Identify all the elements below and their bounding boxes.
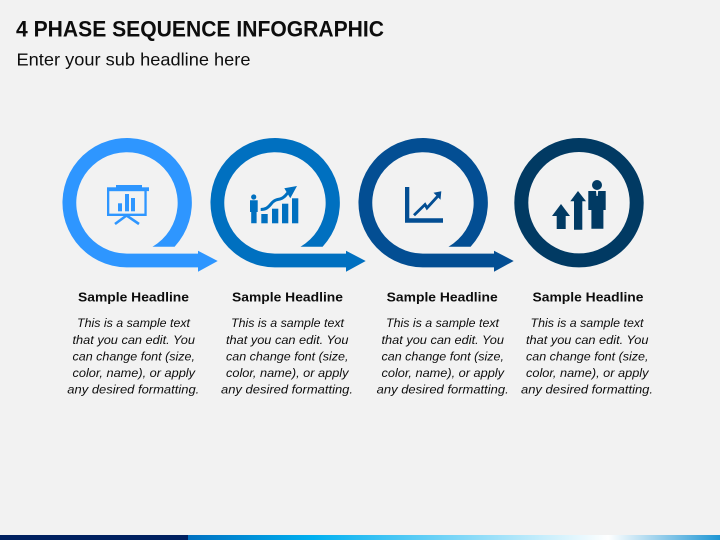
column 2 text [221, 290, 353, 396]
column 3 text: that you can edit. You [382, 333, 504, 347]
column 2 text: color, name), or apply [226, 366, 349, 380]
column 2 text: that you can edit. You [226, 333, 349, 347]
column 3 text: color, name), or apply [382, 366, 505, 380]
column 4 text: Sample Headline [532, 290, 644, 305]
column 4 text: that you can edit. You [526, 333, 649, 347]
column 4 text [521, 290, 653, 396]
subtitle: Enter your sub headline here [16, 50, 250, 70]
icon: line chart with arrow [405, 187, 443, 223]
phase 1 ring arrow [62, 138, 218, 272]
column 1 text [67, 290, 199, 396]
phase 2 ring arrow [210, 138, 366, 272]
column 1 text: color, name), or apply [72, 366, 196, 380]
column 3 text: Sample Headline [387, 290, 498, 305]
column 3 text: can change font (size, [382, 350, 504, 364]
icon: arrows and businessman [552, 180, 606, 230]
column 2 text: any desired formatting. [221, 382, 353, 396]
column 1 text: any desired formatting. [67, 382, 199, 396]
column 3 text [377, 290, 509, 396]
column 4 text: any desired formatting. [521, 382, 653, 396]
column 2 text: This is a sample text [231, 316, 345, 330]
title: 4 PHASE SEQUENCE INFOGRAPHIC [16, 17, 384, 42]
column 3 text: This is a sample text [386, 316, 500, 330]
column 4 text: can change font (size, [526, 350, 648, 364]
column 4 text: This is a sample text [530, 316, 644, 330]
column 1 text: Sample Headline [78, 290, 189, 305]
footer bar [0, 535, 720, 540]
icon: presentation board [107, 185, 149, 224]
phase 4 ring [521, 145, 637, 260]
phase 3 ring arrow [358, 138, 514, 272]
column 2 text: Sample Headline [232, 290, 343, 305]
column 3 text: any desired formatting. [377, 382, 509, 396]
column 1 text: that you can edit. You [72, 333, 195, 347]
column 1 text: This is a sample text [77, 316, 191, 330]
column 4 text: color, name), or apply [526, 366, 649, 380]
icon: person and growth chart [250, 186, 298, 223]
column 1 text: can change font (size, [72, 350, 195, 364]
column 2 text: can change font (size, [226, 350, 348, 364]
